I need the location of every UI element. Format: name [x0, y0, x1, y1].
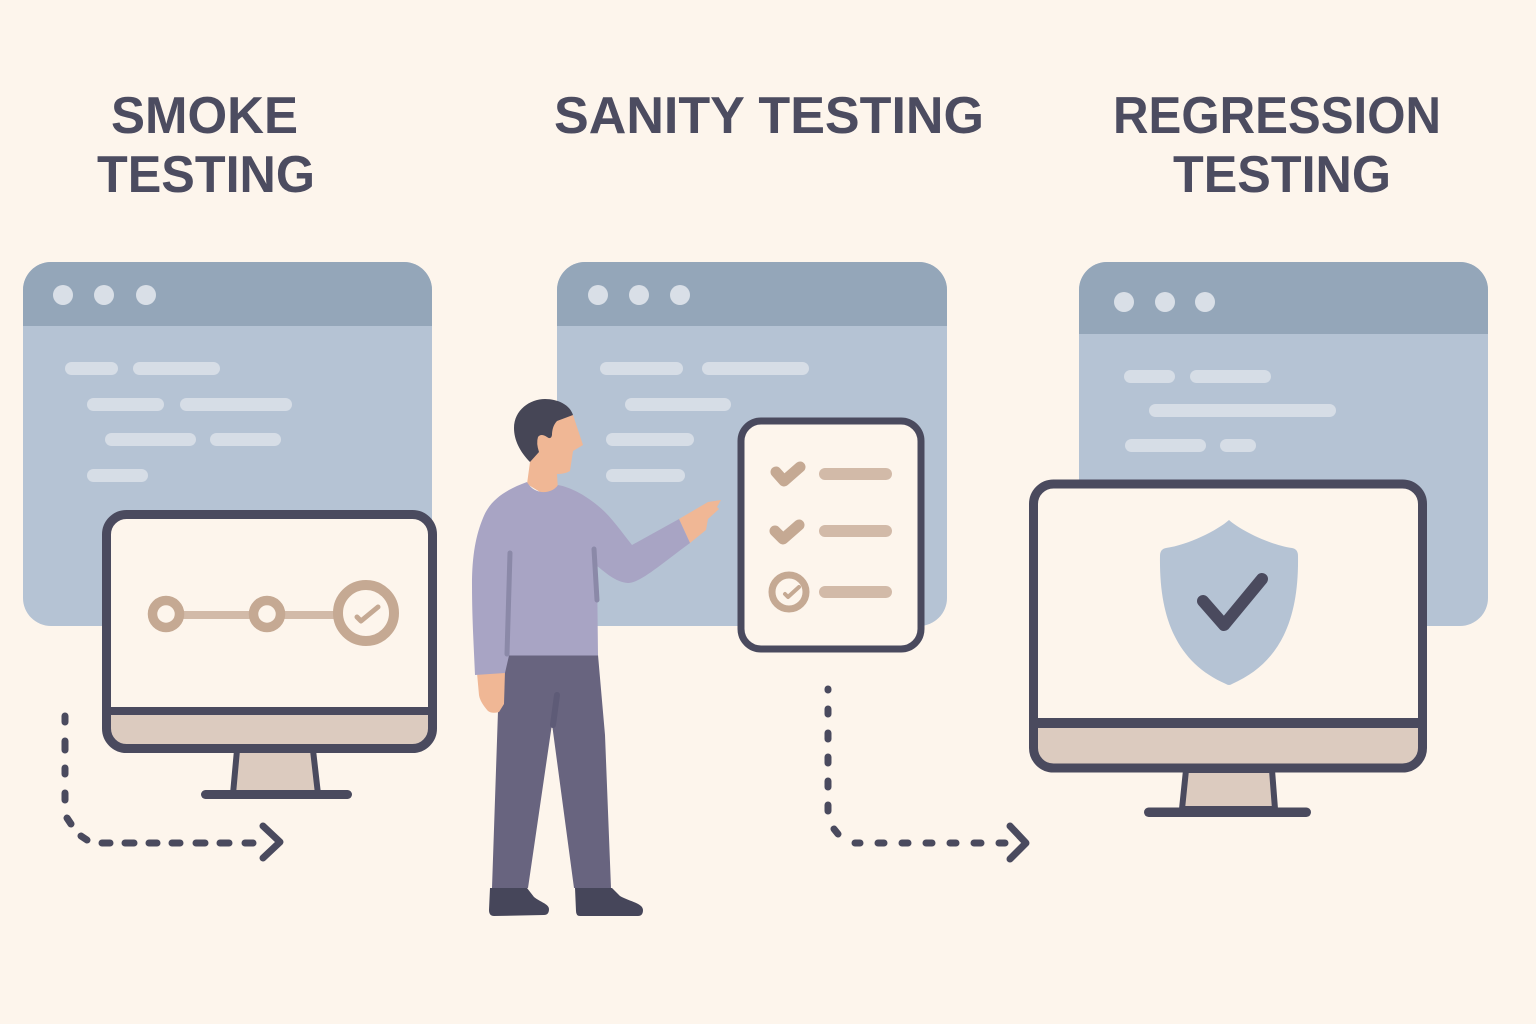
person: shoes [489, 888, 643, 916]
icon: first check item [776, 467, 886, 481]
icon: shield with check [1160, 520, 1298, 685]
heading: smoke testing: SMOKE [111, 87, 298, 145]
heading: regression testing: TESTING [1173, 146, 1391, 204]
monitor: smoke testing [106, 514, 433, 799]
panel: sanity testing browser window [557, 262, 947, 626]
arrow: sanity to regression [828, 689, 1026, 859]
heading: regression testing: REGRESSION [1113, 87, 1441, 145]
person: hair [514, 399, 573, 462]
person pointing at checklist [472, 399, 721, 916]
clipboard checklist [741, 421, 921, 649]
heading: regression testing [1113, 87, 1441, 204]
person: pointing hand [679, 500, 721, 543]
person: sweater [472, 482, 690, 675]
person: left hand [477, 671, 505, 713]
person: sweater folds [507, 549, 597, 654]
panel: regression testing browser window [1079, 262, 1488, 626]
person: neck and face [527, 415, 583, 495]
heading: smoke testing: TESTING [97, 146, 315, 204]
icon: progress steps with check [152, 585, 394, 641]
heading: smoke testing [97, 87, 315, 204]
heading: sanity testing: SANITY TESTING [554, 87, 984, 145]
icon: circled check item [772, 575, 886, 609]
icon: second check item [775, 525, 886, 539]
arrow: smoke to sanity [65, 716, 280, 858]
person: trousers [492, 655, 611, 888]
monitor: regression testing [1033, 484, 1423, 817]
panel: smoke testing browser window [23, 262, 432, 626]
